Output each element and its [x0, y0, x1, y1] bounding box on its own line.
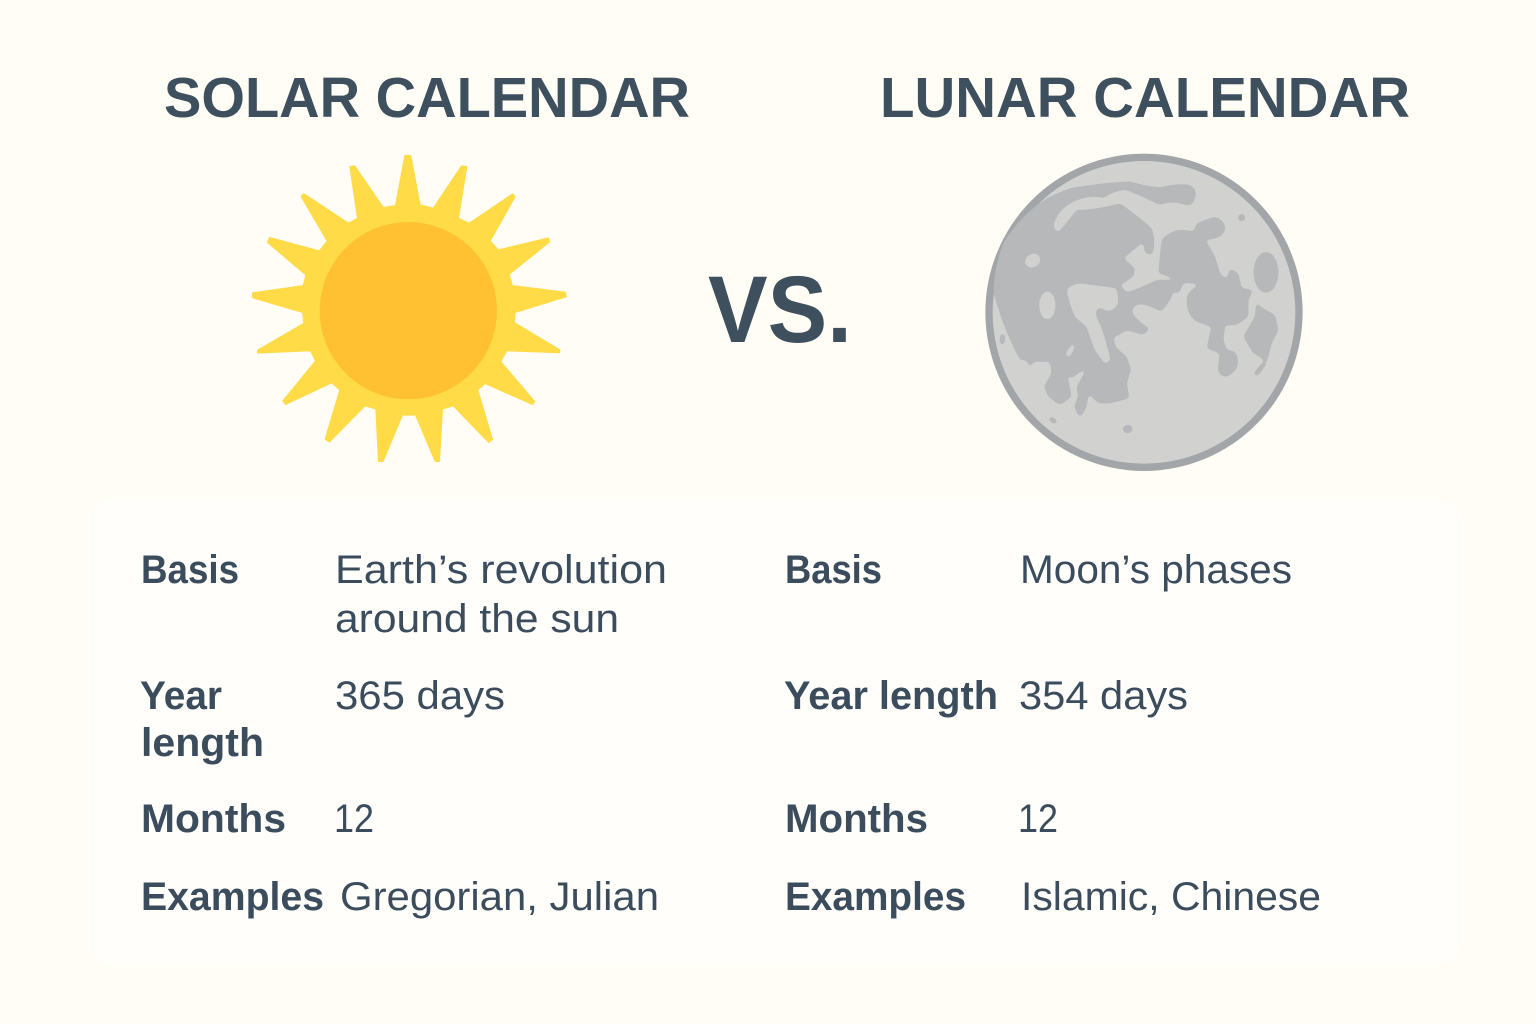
row: lunar year length: Year length — [784, 674, 998, 718]
lunar column details — [784, 548, 1321, 919]
row: lunar year length — [784, 674, 1188, 718]
panel: comparison table — [87, 498, 1460, 966]
row: lunar examples: Islamic, Chinese — [1021, 875, 1321, 919]
row: solar year length: 365 days — [335, 674, 505, 718]
row: lunar months: 12 — [1018, 797, 1058, 841]
row: solar examples: Examples — [141, 875, 324, 919]
row: solar year length: Year — [140, 674, 222, 718]
row: lunar months — [785, 797, 1058, 841]
row: solar year length: length — [141, 721, 264, 765]
solar column details — [140, 548, 667, 919]
row: solar basis — [141, 548, 667, 641]
row: lunar basis: Basis — [785, 548, 882, 592]
heading: versus: VS. — [708, 257, 852, 363]
row: lunar basis — [785, 548, 1292, 592]
row: lunar months: Months — [785, 797, 928, 841]
icon: moon — [985, 154, 1303, 471]
row: solar months — [141, 797, 374, 841]
row: solar basis: around the sun — [335, 597, 619, 641]
row: solar examples: Gregorian, Julian — [340, 875, 659, 919]
icon: sun — [253, 156, 566, 461]
row: lunar examples: Examples — [785, 875, 966, 919]
heading: solar calendar: SOLAR CALENDAR — [164, 66, 690, 130]
row: solar months: Months — [141, 797, 286, 841]
row: lunar examples — [785, 875, 1321, 919]
row: solar examples — [141, 875, 659, 919]
row: solar year length — [140, 674, 505, 765]
row: solar basis: Earth’s revolution — [335, 548, 667, 592]
row: solar months: 12 — [334, 797, 374, 841]
row: lunar year length: 354 days — [1019, 674, 1188, 718]
heading: lunar calendar: LUNAR CALENDAR — [880, 66, 1410, 130]
row: solar basis: Basis — [141, 548, 239, 592]
row: lunar basis: Moon’s phases — [1020, 548, 1292, 592]
